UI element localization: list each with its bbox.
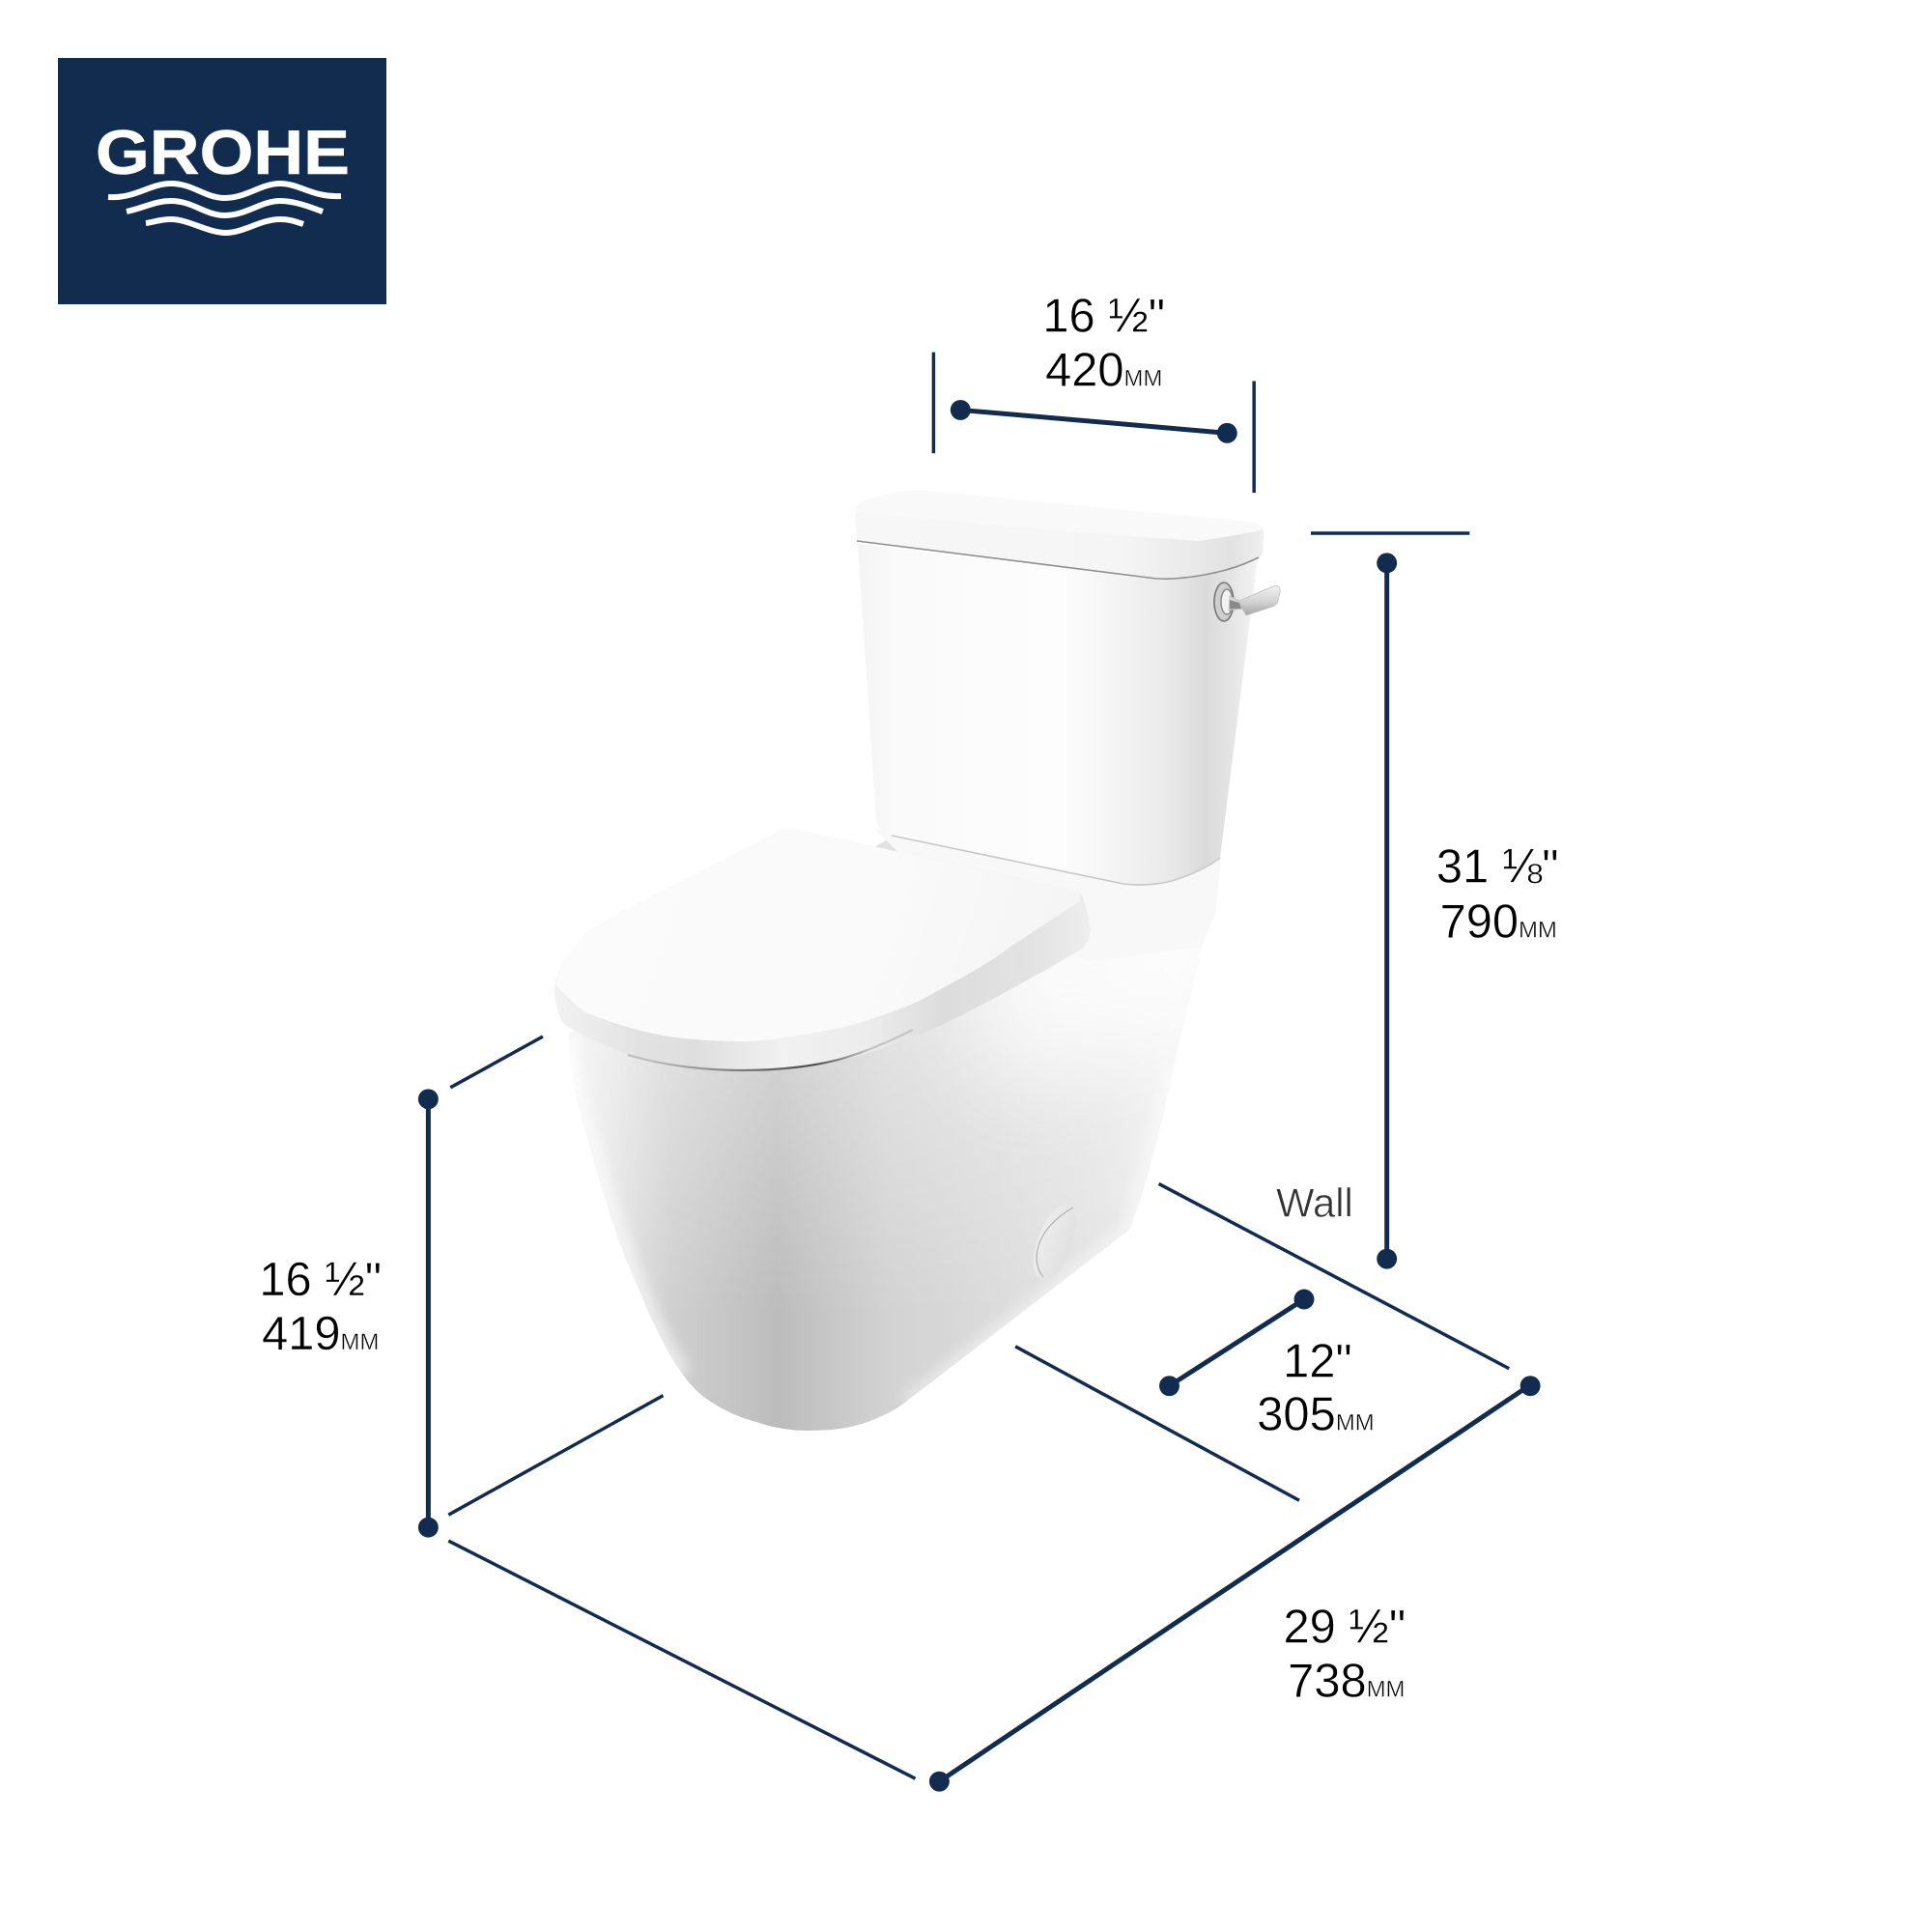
label: tank width: 420MM bbox=[1045, 345, 1162, 397]
dimension: tank width bbox=[933, 289, 1254, 493]
logo: GROHE bbox=[58, 58, 386, 304]
label: seat height: 419MM bbox=[262, 1308, 379, 1360]
dimensions and labels bbox=[259, 289, 1559, 1792]
bowl cap bbox=[1025, 1199, 1085, 1286]
label: total height bbox=[1436, 839, 1559, 948]
label: depth: 738MM bbox=[1288, 1655, 1405, 1707]
tank body bbox=[858, 544, 1258, 885]
seat rim shadow bbox=[628, 1030, 913, 1070]
logo wordmark: GROHE bbox=[96, 117, 350, 187]
label: tank width: 16 ½" bbox=[1042, 289, 1165, 343]
dimension: seat height bbox=[259, 1037, 663, 1538]
label: total height: 31 ⅛" bbox=[1436, 839, 1559, 894]
label: rough-in: 305MM bbox=[1257, 1389, 1375, 1441]
bowl body bbox=[573, 840, 1175, 1431]
label: seat height: 16 ½" bbox=[259, 1252, 382, 1306]
toilet illustration bbox=[554, 491, 1280, 1431]
flush lever bbox=[1214, 582, 1280, 621]
logo waves bbox=[108, 184, 341, 233]
dimension: depth bbox=[448, 1376, 1541, 1792]
label: wall: Wall bbox=[1276, 1179, 1353, 1225]
label: depth bbox=[1283, 1600, 1406, 1707]
label: tank width bbox=[1042, 289, 1165, 397]
label: depth: 29 ½" bbox=[1283, 1600, 1406, 1654]
dimension: total height bbox=[1311, 533, 1559, 1269]
label: seat height bbox=[259, 1252, 382, 1360]
seat lid bbox=[554, 829, 1091, 1070]
bowl neck bbox=[874, 829, 1221, 961]
label: total height: 790MM bbox=[1440, 895, 1557, 948]
tank lid bbox=[855, 491, 1264, 579]
label: rough-in: 12" bbox=[1283, 1336, 1352, 1388]
dimension: rough-in bbox=[1015, 1183, 1509, 1500]
label: rough-in bbox=[1257, 1336, 1375, 1441]
